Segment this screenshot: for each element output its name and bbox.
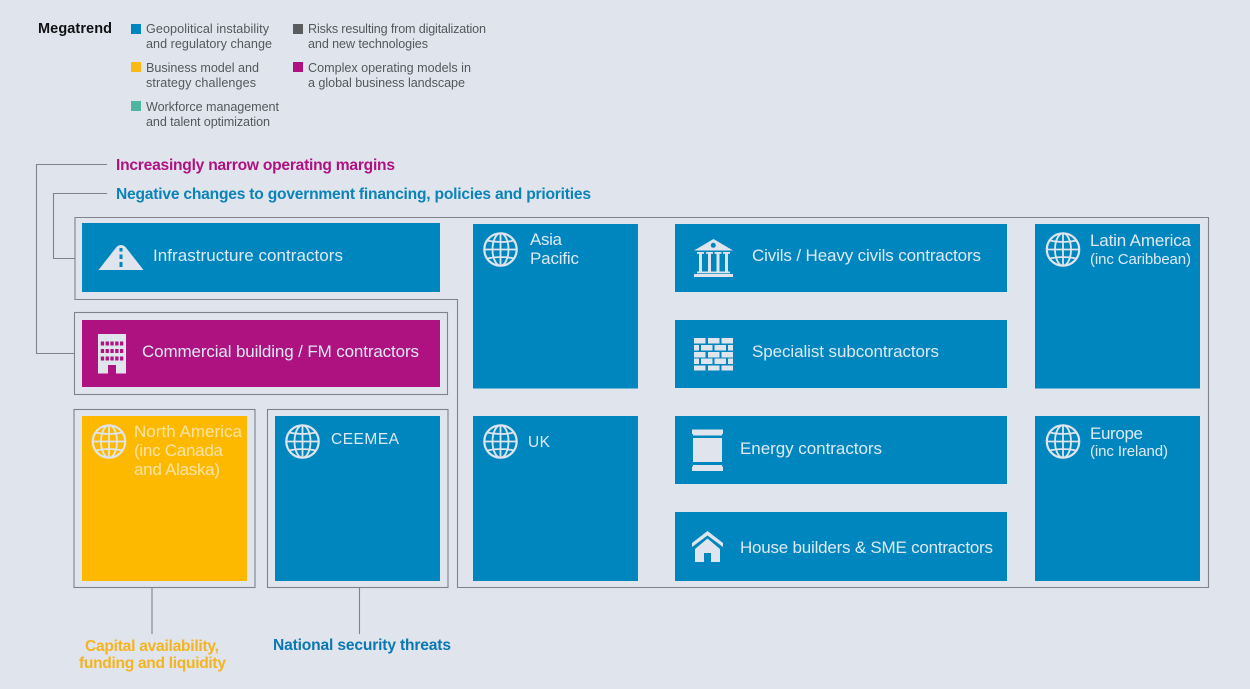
connector: margins bbox=[36, 164, 107, 354]
label: Europe bbox=[1090, 424, 1143, 443]
icon: brick wall bbox=[694, 338, 733, 370]
connector: capital bbox=[151, 588, 153, 634]
label: and Alaska) bbox=[134, 460, 220, 479]
label: Pacific bbox=[530, 249, 580, 268]
panel: commercial building bbox=[82, 320, 440, 387]
legend item: business model bbox=[131, 61, 259, 90]
legend item: workforce: Workforce management bbox=[146, 100, 280, 114]
label bbox=[134, 422, 243, 479]
frame: commercial bbox=[74, 312, 448, 394]
frame: north america bbox=[74, 410, 255, 588]
label: Asia bbox=[530, 230, 563, 249]
panel: civils bbox=[675, 224, 1007, 292]
label: Latin America bbox=[1090, 231, 1192, 250]
heading: national security: National security threats bbox=[273, 637, 451, 654]
label bbox=[530, 230, 580, 268]
label: (inc Ireland) bbox=[1090, 443, 1168, 460]
panel: house builders bbox=[675, 512, 1007, 581]
icon: barrel bbox=[692, 430, 723, 471]
icon: road bbox=[98, 245, 144, 270]
legend item: geopolitical bbox=[131, 22, 272, 51]
legend item: operating models: Complex operating models in bbox=[308, 61, 471, 75]
panel: infrastructure contractors bbox=[82, 223, 440, 292]
label: (inc Caribbean) bbox=[1090, 251, 1191, 268]
legend item: geopolitical: Geopolitical instability bbox=[146, 22, 270, 36]
legend item: operating models bbox=[293, 61, 471, 90]
label: North America bbox=[134, 422, 243, 441]
label: Infrastructure contractors bbox=[153, 246, 343, 265]
icon: globe bbox=[93, 425, 125, 458]
legend item: business model: strategy challenges bbox=[146, 76, 256, 90]
label: House builders & SME contractors bbox=[740, 538, 993, 557]
label: (inc Canada bbox=[134, 441, 224, 460]
legend item: workforce bbox=[131, 100, 280, 129]
legend item: operating models: a global business landscape bbox=[308, 76, 465, 90]
panel: ceemea bbox=[275, 416, 440, 581]
panel: uk bbox=[473, 416, 638, 581]
heading: capital availability: Capital availability, bbox=[85, 638, 219, 655]
label: CEEMEA bbox=[331, 431, 400, 448]
legend item: workforce: and talent optimization bbox=[146, 115, 270, 129]
label: Civils / Heavy civils contractors bbox=[752, 246, 981, 265]
label bbox=[1090, 231, 1192, 268]
frame: government group bbox=[75, 218, 1208, 588]
panel: energy bbox=[675, 416, 1007, 484]
icon: globe bbox=[286, 425, 319, 458]
icon: globe bbox=[1047, 425, 1079, 458]
icon: temple bbox=[694, 239, 733, 277]
legend item: business model: Business model and bbox=[146, 61, 259, 75]
legend item: digitalization: and new technologies bbox=[308, 37, 428, 51]
heading: operating margins: Increasingly narrow operating margins bbox=[116, 157, 395, 174]
icon: globe bbox=[484, 425, 517, 458]
legend title: Megatrend bbox=[38, 21, 112, 37]
icon: globe bbox=[484, 233, 517, 266]
legend item: digitalization: Risks resulting from digitalization bbox=[308, 22, 486, 36]
legend bbox=[38, 21, 486, 129]
label: Commercial building / FM contractors bbox=[142, 342, 419, 361]
connector: security bbox=[358, 588, 360, 634]
label: Energy contractors bbox=[740, 439, 882, 458]
frame: ceemea bbox=[268, 410, 448, 588]
icon: house bbox=[692, 531, 723, 562]
panel: asia pacific bbox=[473, 224, 638, 388]
panel: latin america bbox=[1035, 224, 1200, 388]
label: Specialist subcontractors bbox=[752, 342, 939, 361]
panel: north america bbox=[82, 416, 247, 581]
legend item: geopolitical: and regulatory change bbox=[146, 37, 272, 51]
icon: office building bbox=[98, 334, 126, 374]
label bbox=[1090, 424, 1168, 460]
heading: capital availability bbox=[79, 638, 226, 672]
legend item: digitalization bbox=[293, 22, 486, 51]
connector: government bbox=[54, 194, 107, 258]
panel: specialist bbox=[675, 320, 1007, 388]
heading: capital availability: funding and liquidity bbox=[79, 655, 226, 672]
panel: europe bbox=[1035, 416, 1200, 581]
label: UK bbox=[528, 434, 551, 451]
heading: government financing: Negative changes to government financing, policies and priorities bbox=[116, 186, 591, 203]
icon: globe bbox=[1047, 233, 1079, 266]
